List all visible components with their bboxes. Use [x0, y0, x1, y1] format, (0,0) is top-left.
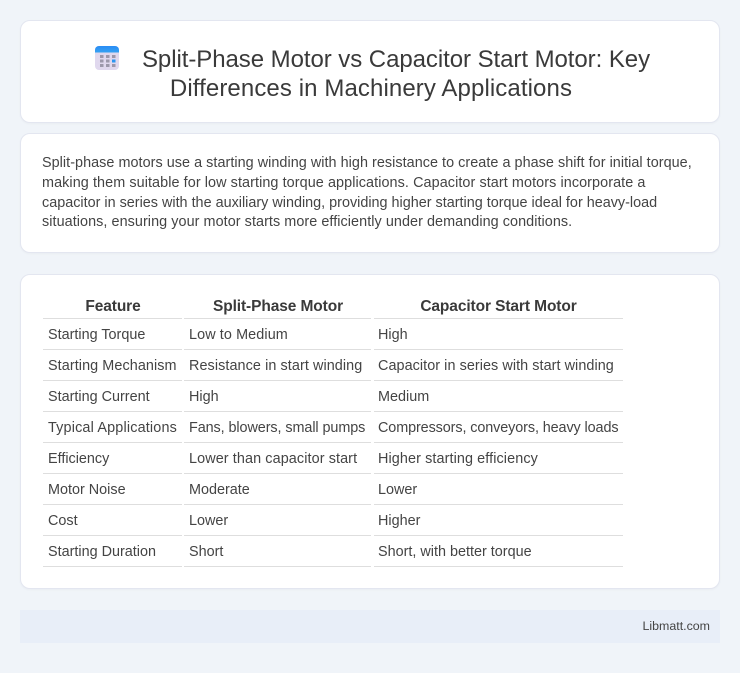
row: Starting Current: Starting Current: [48, 389, 150, 405]
text block: description: capacitor in series with the auxiliary winding, providing higher starting torque ideal for heavy-load: [42, 195, 657, 211]
row: Starting Current: Medium: [378, 389, 429, 405]
table header: Feature: [85, 298, 141, 315]
row: Starting Duration: Short, with better torque: [378, 544, 532, 560]
title: [142, 46, 650, 102]
row: Starting Mechanism: Capacitor in series with start winding: [378, 358, 614, 374]
table header: Split-Phase Motor: [213, 298, 343, 315]
row: Typical Applications: Fans, blowers, small pumps: [189, 420, 365, 436]
row: Cost: Lower: [189, 513, 228, 529]
row: Starting Mechanism: Starting Mechanism: [48, 358, 177, 374]
row: Starting Torque: [43, 327, 623, 350]
text block: description: making them suitable for low starting torque applications. Capacitor start motors incorporate a: [42, 175, 646, 191]
title: Split-Phase Motor vs Capacitor Start Motor: Key: [142, 46, 650, 73]
row: Starting Torque: Low to Medium: [189, 327, 288, 343]
row: Cost: Cost: [48, 513, 78, 529]
row: Starting Duration: Starting Duration: [48, 544, 156, 560]
row: Starting Torque: Starting Torque: [48, 327, 145, 343]
row: Motor Noise: Moderate: [189, 482, 250, 498]
row: Starting Mechanism: Resistance in start winding: [189, 358, 362, 374]
row: Typical Applications: Compressors, conveyors, heavy loads: [378, 420, 618, 436]
row: Starting Mechanism: [43, 358, 623, 381]
row: Efficiency: Lower than capacitor start: [189, 451, 357, 467]
text block: description: Split-phase motors use a starting winding with high resistance to create a phase shift for initial torque,: [42, 155, 692, 171]
footer bar: [20, 610, 720, 643]
table header: [43, 298, 623, 319]
row: Cost: Higher: [378, 513, 420, 529]
row: Starting Current: [43, 389, 623, 412]
panel: description: [20, 133, 720, 253]
panel: title card: [20, 20, 720, 123]
row: Cost: [43, 513, 623, 536]
panel: comparison table: [20, 274, 720, 589]
row: Starting Duration: Short: [189, 544, 223, 560]
table rows: [43, 327, 623, 567]
footer text: Libmatt.com: [643, 619, 710, 633]
row: Starting Torque: High: [378, 327, 408, 343]
table header: Capacitor Start Motor: [420, 298, 577, 315]
row: Efficiency: Efficiency: [48, 451, 109, 467]
text block: description: situations, ensuring your motor starts more efficiently under demanding conditions.: [42, 214, 572, 230]
row: Typical Applications: Typical Applications: [48, 420, 177, 436]
row: Motor Noise: Motor Noise: [48, 482, 126, 498]
row: Efficiency: [43, 451, 623, 474]
row: Efficiency: Higher starting efficiency: [378, 451, 538, 467]
row: Typical Applications: [43, 420, 623, 443]
row: Starting Duration: [43, 544, 623, 567]
row: Motor Noise: [43, 482, 623, 505]
row: Motor Noise: Lower: [378, 482, 417, 498]
title: Differences in Machinery Applications: [170, 75, 572, 102]
icon: calendar: [95, 46, 119, 70]
text block: description: [42, 155, 692, 230]
row: Starting Current: High: [189, 389, 219, 405]
